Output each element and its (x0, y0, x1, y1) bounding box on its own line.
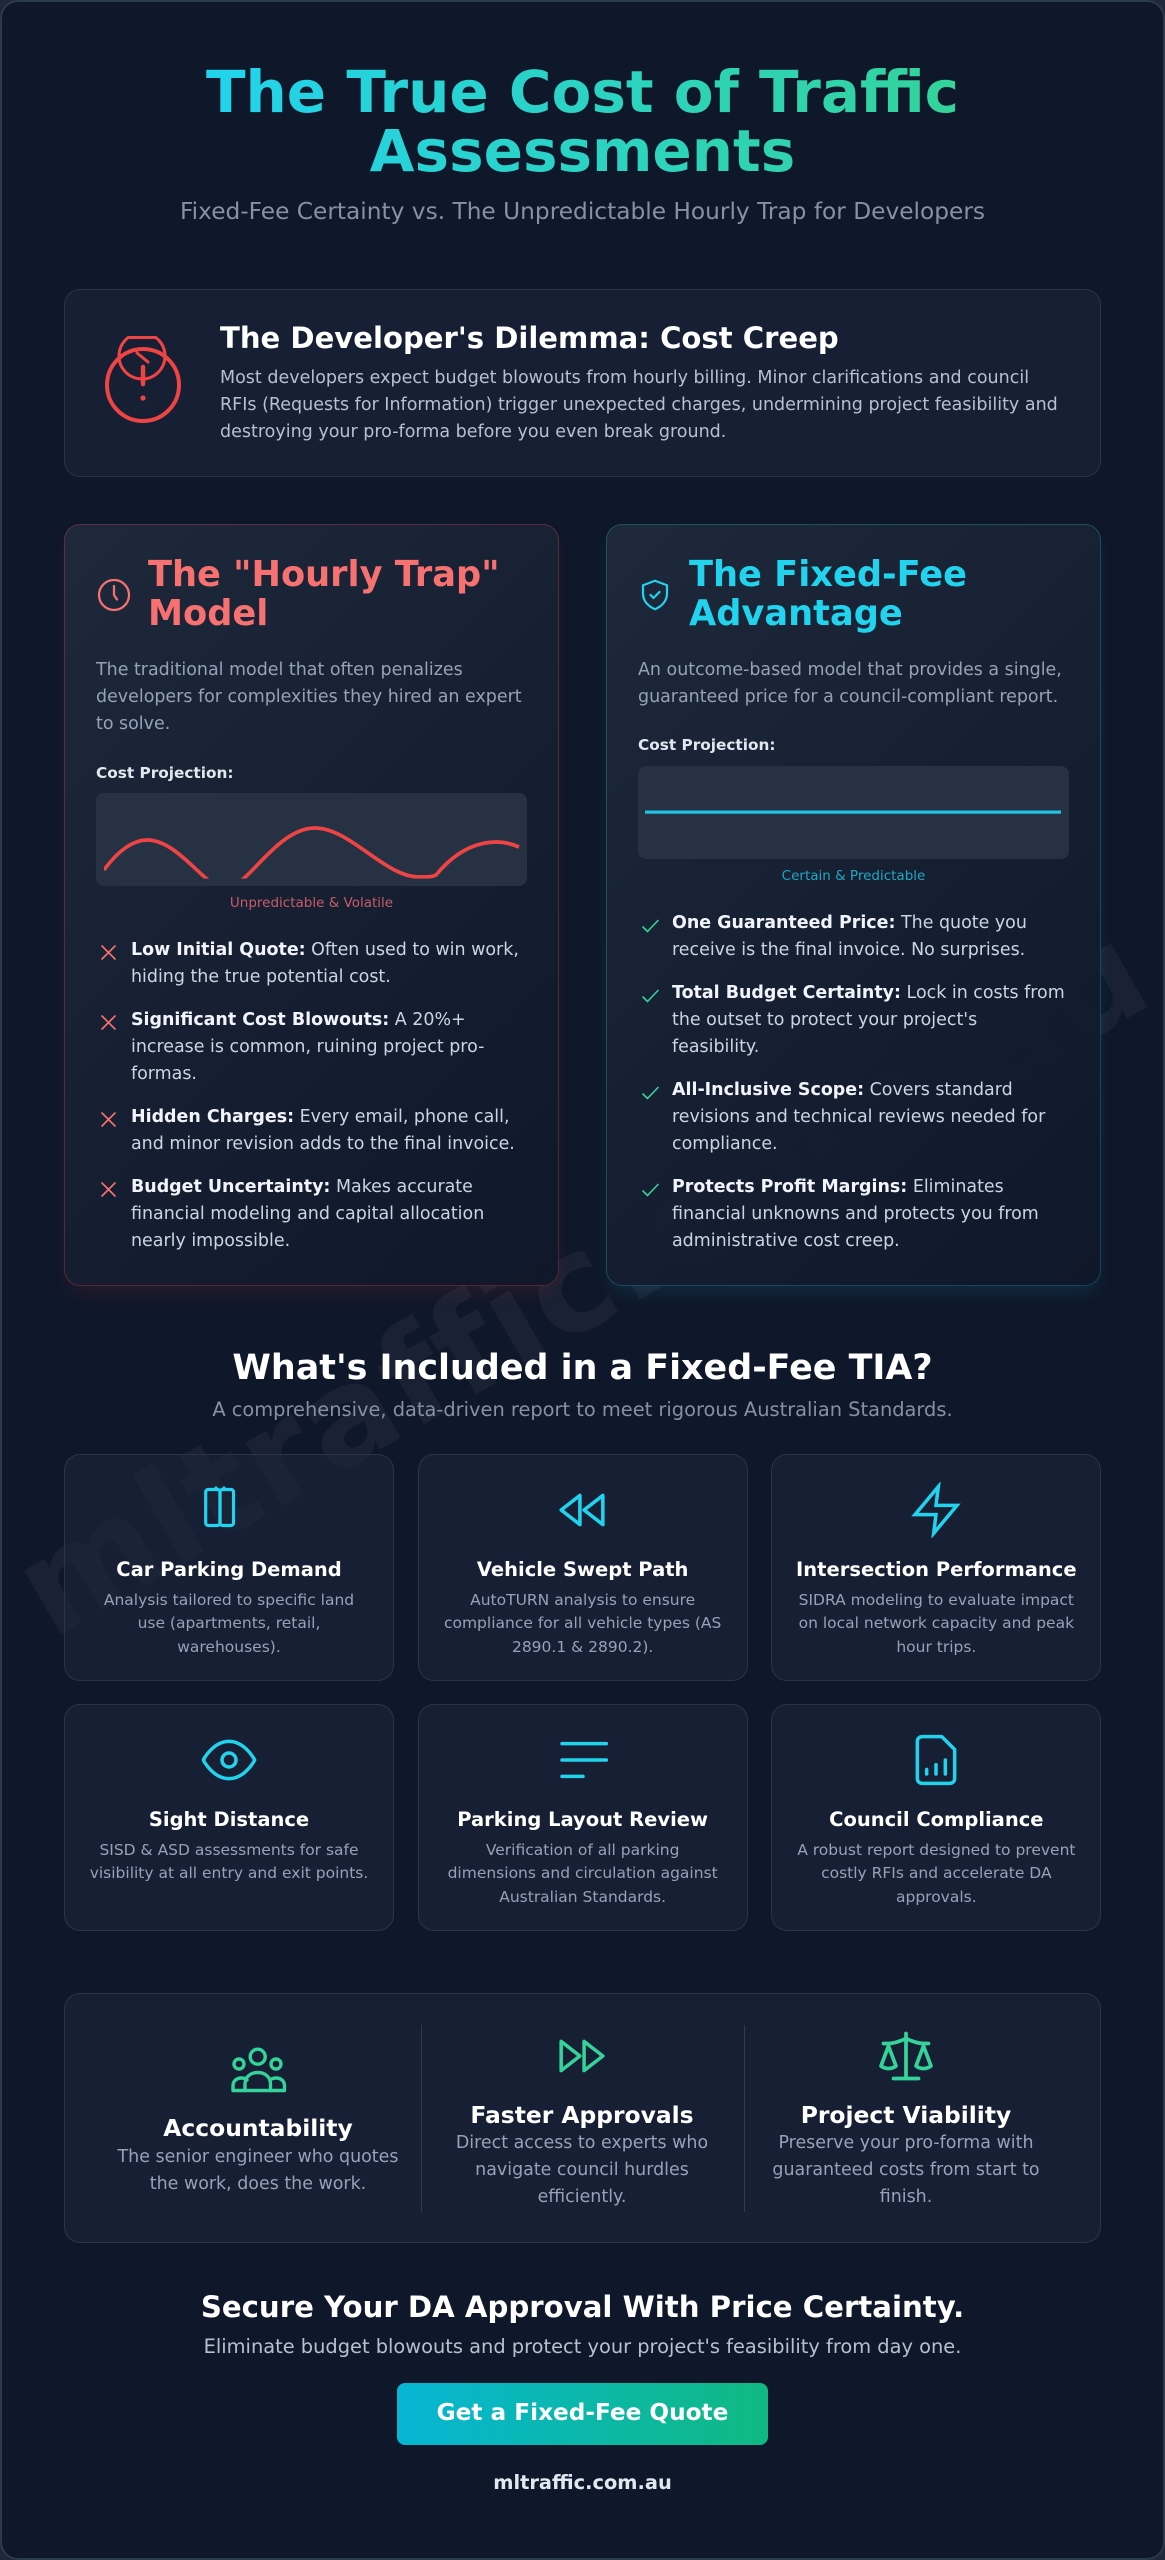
benefit text: guaranteed costs from start to (772, 2160, 1040, 2180)
card text: Australian Standards. (499, 1888, 666, 1906)
section subheading: A comprehensive, data-driven report to meet rigorous Australian Standards. (212, 1398, 953, 1421)
card title: Intersection Performance (796, 1558, 1077, 1580)
benefit text (745, 2130, 1067, 2212)
icon: eye (202, 1740, 256, 1780)
subtitle: Fixed-Fee Certainty vs. The Unpredictable Hourly Trap for Developers (180, 198, 985, 225)
card text: SIDRA modeling to evaluate impact (799, 1590, 1074, 1608)
hourly heading: The "Hourly Trap" (148, 554, 500, 595)
icon: people (231, 2048, 286, 2092)
card title: Parking Layout Review (457, 1808, 708, 1830)
panel: benefits (64, 1993, 1101, 2243)
list item: low initial quote: Low Initial Quote: Often used to win work, (131, 940, 519, 960)
title (196, 63, 969, 181)
list item: budget uncertainty (101, 1176, 484, 1250)
list item: total budget certainty: feasibility. (672, 1036, 759, 1056)
list item: budget uncertainty: nearly impossible. (131, 1230, 290, 1250)
fixed-fee heading: Advantage (689, 593, 903, 634)
benefit text: Direct access to experts who (456, 2133, 708, 2153)
list item: all-inclusive scope: compliance. (672, 1134, 778, 1154)
button: Get a Fixed-Fee Quote (437, 2399, 728, 2426)
icon: cross (101, 1015, 116, 1030)
card title: Car Parking Demand (116, 1558, 342, 1580)
list item: one guaranteed price: receive is the final invoice. No surprises. (672, 940, 1025, 960)
icon: check (642, 1184, 659, 1196)
icon: cross (101, 945, 116, 960)
list item: low initial quote: hiding the true potential cost. (131, 966, 391, 986)
list item: hidden charges (101, 1106, 515, 1154)
title: Assessments (370, 117, 795, 185)
panel: developer's dilemma (64, 289, 1101, 477)
icon: cross (101, 1182, 116, 1197)
list item: significant cost blowouts: formas. (131, 1064, 197, 1084)
icon: check (642, 920, 659, 932)
panel: hourly trap model (64, 524, 559, 1286)
list item: one guaranteed price (642, 912, 1027, 960)
list item: hidden charges: Hidden Charges: Every email, phone call, (131, 1106, 510, 1126)
card: intersection performance (771, 1454, 1101, 1681)
chart: volatile cost curve (96, 793, 527, 886)
dilemma text: RFIs (Requests for Information) trigger unexpected charges, undermining project feasibility and (220, 394, 1058, 414)
icon: scales (876, 2026, 936, 2086)
benefit text (423, 2130, 741, 2212)
card text: Verification of all parking (486, 1840, 679, 1858)
card: sight distance (64, 1704, 394, 1931)
dilemma heading: The Developer's Dilemma: Cost Creep (220, 321, 839, 355)
benefit: accountability (117, 2048, 398, 2194)
benefit text: navigate council hurdles (475, 2160, 689, 2180)
card: parking layout review (418, 1704, 748, 1931)
icon: fast forward (559, 2040, 605, 2072)
benefit text: the work, does the work. (150, 2174, 366, 2194)
card text: compliance for all vehicle types (AS (444, 1614, 721, 1632)
card text: visibility at all entry and exit points. (90, 1864, 368, 1882)
card title: Sight Distance (149, 1808, 309, 1830)
watermark: mltraffic.com.au (0, 893, 1165, 1667)
icon: report file (916, 1734, 956, 1786)
card text: approvals. (896, 1888, 977, 1906)
icon: cross (101, 1112, 116, 1127)
benefit title: Accountability (163, 2114, 353, 2142)
fixed-fee heading (689, 554, 967, 634)
list item: protects profit margins: Protects Profit Margins: Eliminates (672, 1176, 1004, 1196)
list item: all-inclusive scope: All-Inclusive Scope: Covers standard (672, 1080, 1013, 1100)
icon: alarm warning (105, 336, 181, 423)
list item: low initial quote (101, 940, 519, 986)
benefit text: Preserve your pro-forma with (778, 2133, 1034, 2153)
benefit: faster approvals (456, 2040, 708, 2207)
list item: protects profit margins: administrative cost creep. (672, 1230, 900, 1250)
icon: check (642, 1086, 659, 1100)
list item: significant cost blowouts (101, 1010, 484, 1084)
cost projection label: Cost Projection: (638, 736, 776, 754)
icon: lines (560, 1742, 608, 1778)
dilemma text: destroying your pro-forma before you even break ground. (220, 422, 726, 442)
hourly intro: The traditional model that often penalizes (96, 660, 463, 680)
fixed-fee intro: An outcome-based model that provides a single, (638, 660, 1062, 680)
hourly intro (96, 660, 522, 734)
card text: 2890.1 & 2890.2). (512, 1638, 653, 1656)
card: council compliance (771, 1704, 1101, 1931)
benefit title: Faster Approvals (470, 2101, 694, 2129)
chart caption: Unpredictable & Volatile (230, 895, 393, 911)
benefit text: efficiently. (538, 2187, 626, 2207)
card title: Vehicle Swept Path (477, 1558, 688, 1580)
card text (104, 1590, 354, 1656)
fixed-fee intro (638, 660, 1062, 707)
hourly intro: developers for complexities they hired an expert (96, 687, 522, 707)
list item: total budget certainty (642, 982, 1065, 1056)
card text (799, 1590, 1074, 1656)
card text: dimensions and circulation against (448, 1864, 718, 1882)
icon: check (642, 990, 659, 1002)
dilemma text (220, 368, 1058, 442)
chart caption: Certain & Predictable (782, 868, 925, 884)
card text (444, 1590, 721, 1656)
benefit text (117, 2146, 398, 2194)
icon: lightning bolt (911, 1482, 961, 1538)
chart: flat cost line (638, 766, 1069, 859)
list item: protects profit margins (642, 1176, 1039, 1250)
website: mltraffic.com.au (493, 2471, 672, 2494)
fixed-fee heading: The Fixed-Fee (689, 554, 967, 595)
card: car parking demand (64, 1454, 394, 1681)
hourly heading: Model (148, 593, 268, 634)
card text (90, 1840, 368, 1882)
list item: budget uncertainty: Budget Uncertainty: Makes accurate (131, 1176, 473, 1196)
cost projection label: Cost Projection: (96, 764, 234, 782)
card text (797, 1840, 1076, 1906)
card text: on local network capacity and peak (799, 1614, 1074, 1632)
title: The True Cost of Traffic (206, 58, 959, 126)
list item: one guaranteed price: One Guaranteed Price: The quote you (672, 912, 1027, 932)
button (397, 2383, 768, 2445)
list item: all-inclusive scope (642, 1080, 1046, 1154)
benefit title: Project Viability (801, 2101, 1011, 2129)
fixed-fee intro: guaranteed price for a council-compliant report. (638, 687, 1058, 707)
card text: AutoTURN analysis to ensure (470, 1590, 695, 1608)
icon: parking columns (204, 1486, 236, 1528)
list item: significant cost blowouts: Significant Cost Blowouts: A 20%+ (131, 1010, 466, 1030)
call to action text: Eliminate budget blowouts and protect your project's feasibility from day one. (204, 2335, 961, 2358)
hourly heading (148, 554, 500, 634)
card text: Analysis tailored to specific land (104, 1590, 354, 1608)
icon: clock (98, 578, 130, 612)
card title: Council Compliance (829, 1808, 1044, 1830)
benefit: project viability (745, 2025, 1067, 2212)
card text: A robust report designed to prevent (797, 1840, 1075, 1858)
dilemma text: Most developers expect budget blowouts from hourly billing. Minor clarifications and council (220, 368, 1029, 388)
icon: shield check (642, 580, 668, 610)
list item: total budget certainty: Total Budget Certainty: Lock in costs from (672, 982, 1065, 1002)
section heading: what's included: What's Included in a Fixed-Fee TIA? (232, 1348, 933, 1388)
card text: SISD & ASD assessments for safe (99, 1840, 359, 1858)
list item: budget uncertainty: financial modeling and capital allocation (131, 1204, 484, 1224)
card text: use (apartments, retail, (138, 1614, 320, 1632)
call to action heading: Secure Your DA Approval With Price Certainty. (201, 2290, 964, 2324)
list item: significant cost blowouts: increase is common, ruining project pro- (131, 1036, 484, 1056)
list item: protects profit margins: financial unknowns and protects you from (672, 1204, 1039, 1224)
card text (448, 1840, 718, 1906)
card text: warehouses). (177, 1638, 281, 1656)
list item: hidden charges: and minor revision adds to the final invoice. (131, 1134, 515, 1154)
panel: fixed-fee advantage (606, 524, 1101, 1286)
hourly intro: to solve. (96, 714, 170, 734)
card: vehicle swept path (418, 1454, 748, 1681)
card text: hour trips. (896, 1638, 976, 1656)
list item: total budget certainty: the outset to protect your project's (672, 1010, 977, 1030)
card text: costly RFIs and accelerate DA (821, 1864, 1052, 1882)
icon: rewind (559, 1494, 605, 1526)
list item: all-inclusive scope: revisions and technical reviews needed for (672, 1106, 1045, 1126)
benefit text: The senior engineer who quotes (118, 2146, 398, 2166)
benefit text: finish. (880, 2187, 932, 2207)
